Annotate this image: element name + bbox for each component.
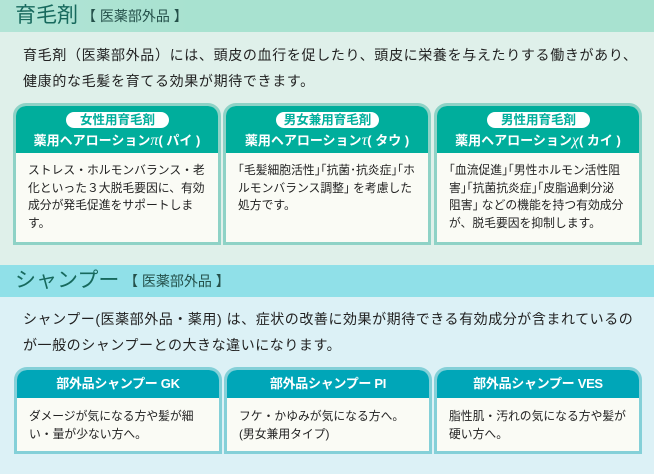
card header: women's [16,106,218,153]
intro text: shampoo: が一般のシャンプーとの大きな違いになります。 [23,336,341,352]
card text: women's: 成分が発毛促進をサポートしま [28,198,193,212]
card header: PI [227,370,429,398]
card header: GK: 部外品シャンプー GK [56,376,180,391]
panel: hair tonic section [0,0,654,265]
card text: PI: (男女兼用タイプ) [239,427,329,441]
pill label: women's [66,112,169,128]
card text: men's: 阻害｣ などの機能を持つ有効成分 [449,198,623,212]
heading band: shampoo [0,265,654,297]
intro text: shampoo [23,311,633,352]
subtitle: quasi-drug: 【 医薬部外品 】 [82,8,188,24]
card text: unisex: ルモンバランス調整｣ を考慮した [238,181,412,195]
card header: PI: 部外品シャンプー PI [270,376,386,391]
title: shampoo: シャンプー [15,269,119,292]
card text: men's: ｢血流促進｣｢男性ホルモン活性阻 [449,163,620,177]
intro text: hair tonic: 健康的な毛髪を育てる効果が期待できます。 [23,72,315,88]
card text: GK: ダメージが気になる方や髪が細 [29,409,194,423]
card header: GK [17,370,219,398]
card header: VES [437,370,639,398]
card text: unisex: 処方です。 [238,198,296,212]
card text: GK [29,409,194,441]
card text: women's [28,163,205,230]
subtitle: quasi-drug: 【 医薬部外品 】 [124,273,230,289]
pill label: men's: 男性用育毛剤 [501,113,576,127]
pill label: women's: 女性用育毛剤 [80,113,155,127]
card: shampoo GK [14,367,222,454]
card text: PI [239,409,404,441]
card text: GK: い・量が少ない方へ。 [29,427,147,441]
pill label: men's [487,112,590,128]
card: unisex hair tonic [223,103,431,245]
heading band: hair tonic [0,0,654,32]
intro text: hair tonic [23,47,638,88]
card: shampoo PI [224,367,432,454]
card text: VES [449,409,626,441]
card text: women's: す。 [28,216,50,230]
card: shampoo VES [434,367,642,454]
card text: men's: が、脱毛要因を抑制します。 [449,216,601,230]
intro text: shampoo: シャンプー(医薬部外品・薬用) は、症状の改善に効果が期待できる有効成分が含まれているの [23,311,633,327]
card text: women's: ストレス・ホルモンバランス・老 [28,163,205,177]
card text: men's: 害｣｢抗菌抗炎症｣｢皮脂過剰分泌 [449,181,614,195]
card text: unisex: ｢毛髪細胞活性｣｢抗菌･抗炎症｣｢ホ [238,163,415,177]
card header: unisex [226,106,428,153]
intro text: hair tonic: 育毛剤（医薬部外品）には、頭皮の血行を促したり、頭皮に栄養を与えたりする働きがあり、 [23,47,638,63]
product name: pi: 薬用ヘアローションπ( パイ ) [34,132,200,149]
product name: chi: 薬用ヘアローションχ( カイ ) [455,132,621,149]
card text: VES: 硬い方へ。 [449,427,508,441]
pill label: unisex: 男女兼用育毛剤 [284,113,371,127]
card text: women's: 化といった３大脱毛要因に、有効 [28,181,205,195]
title: hair tonic: 育毛剤 [15,4,78,27]
card header: VES: 部外品シャンプー VES [473,376,603,391]
card: men's hair tonic [434,103,642,245]
card header: men's [437,106,639,153]
card text: VES: 脂性肌・汚れの気になる方や髪が [449,409,626,423]
panel: shampoo section [0,265,654,474]
card text: men's [449,163,623,230]
card text: unisex [238,163,415,212]
card text: PI: フケ・かゆみが気になる方へ。 [239,409,404,423]
card: women's hair tonic [13,103,221,245]
product name: tau: 薬用ヘアローションτ( タウ ) [245,132,409,149]
